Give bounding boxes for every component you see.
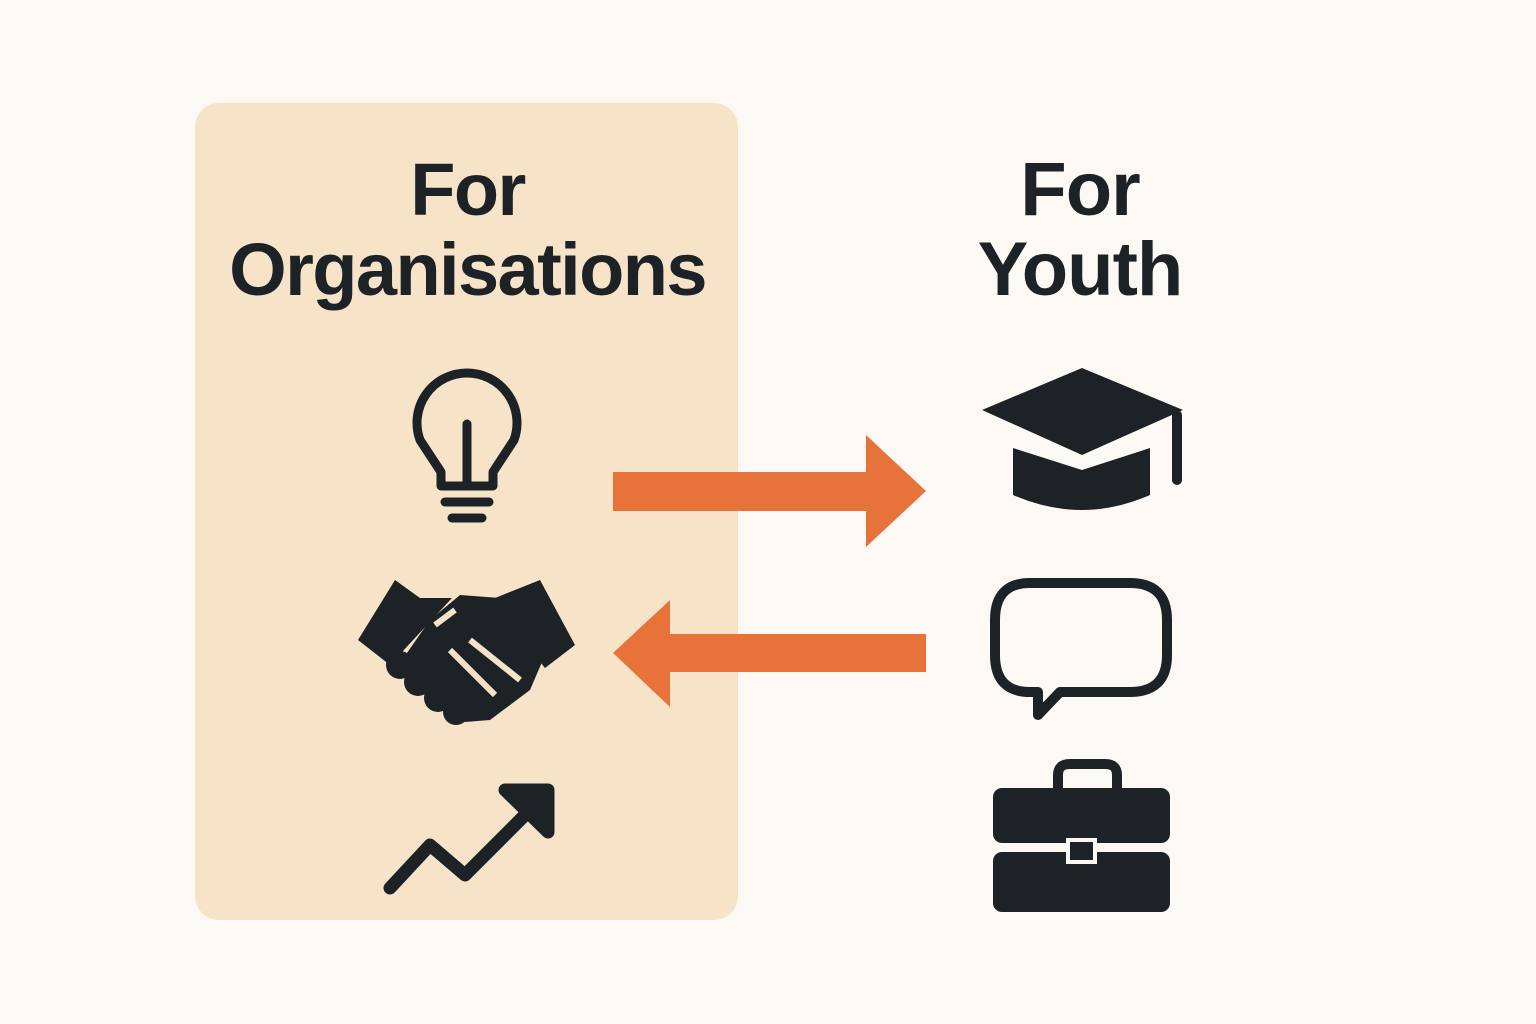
panel: organisations <box>195 103 738 920</box>
arrow: to youth <box>613 435 926 547</box>
heading: For Organisations: Organisations <box>229 228 706 311</box>
icon: briefcase <box>993 764 1170 912</box>
heading: For Organisations <box>229 148 706 311</box>
icon: handshake <box>358 580 575 725</box>
heading: For Organisations: For <box>410 148 525 231</box>
arrow: to organisations <box>613 600 926 707</box>
heading: For Youth: For <box>1020 147 1140 232</box>
icon: speech bubble <box>995 583 1167 715</box>
heading: For Youth <box>978 147 1182 312</box>
icon: graduation cap <box>982 368 1183 510</box>
heading: For Youth: Youth <box>978 227 1182 312</box>
icon: trend arrow <box>390 790 548 888</box>
icon: light bulb <box>417 373 517 518</box>
